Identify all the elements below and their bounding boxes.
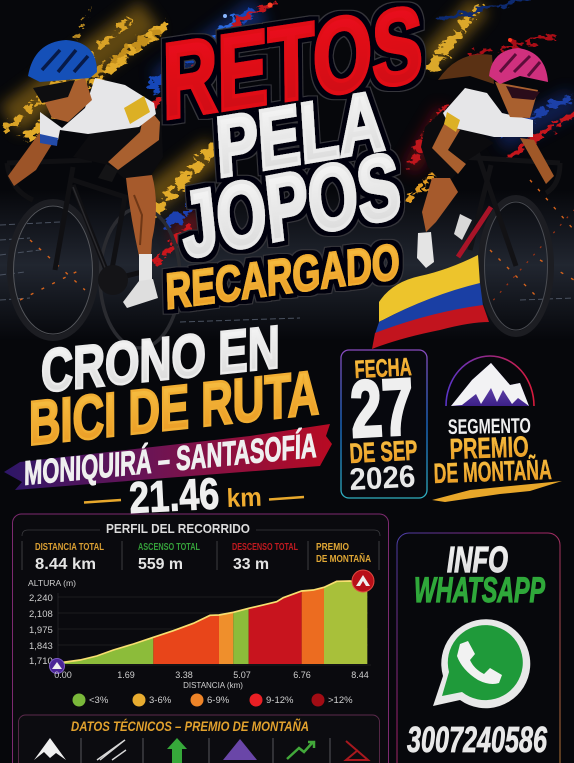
y axis labels: 2,240 [29,593,53,604]
title: PELA: PELA [213,73,387,195]
x axis labels [54,670,369,690]
right rider sunglasses [506,86,540,100]
right rider shoe [417,232,434,268]
x axis labels: DISTANCIA (km) [183,681,243,690]
gradient legend: 6-9% [207,695,230,706]
stat: mountain prize: PREMIO [316,542,349,553]
badge ring [446,356,534,406]
banner text: MONIQUIRÁ – SANTASOFÍA [24,427,317,493]
stat: distance [35,542,104,573]
banner brush [4,424,332,490]
right rider far shoe [454,214,472,240]
left bike frame [7,160,150,280]
badge mountain [451,363,529,406]
stat: ascent: ASCENSO TOTAL [138,542,200,553]
colombian flag [372,255,489,349]
left rider helmet [28,40,97,82]
y axis labels [28,578,76,667]
y axis labels: 1,710 [29,656,53,667]
left rider face [40,78,92,122]
premio text: PREMIO [449,431,529,466]
distance unit: km [226,482,262,513]
gradient legend [72,694,353,706]
stat: ascent: 559 m [138,556,183,573]
route banner [4,424,332,493]
segment badge [432,356,562,502]
right bike frame [461,143,560,266]
left rider shorts [73,108,163,180]
elevation chart [28,570,374,690]
left bike front wheel [10,202,96,338]
x axis labels: 1.69 [117,670,135,680]
gradient legend: >12% [328,695,353,706]
date year: 2026 [349,459,416,497]
right rider arm [432,122,466,174]
icon: green trend arrow [287,742,314,759]
technical data heading: DATOS TÉCNICOS – PREMIO DE MONTAÑA [71,717,309,734]
distance value: 21.46 [128,469,220,523]
panel: whatsapp contact [397,533,560,763]
x axis labels: 6.76 [293,670,311,680]
date card [341,350,427,498]
x axis labels: 5.07 [233,670,251,680]
gradient legend: 3-6% [149,695,172,706]
left rider sunglasses [33,80,75,103]
gradient legend: 9-12% [266,695,294,706]
gradient legend: <3% [89,695,109,706]
y axis labels: 1,843 [29,641,53,652]
stat: descent: 33 m [233,556,269,573]
title [162,0,423,320]
info heading: INFO [447,539,508,580]
left rider leg [126,175,156,256]
date label: FECHA [354,353,412,384]
right helmet vents [500,54,540,76]
cyclist right [417,48,560,334]
right bike front wheel [481,198,551,334]
background: paint splashes [0,0,574,340]
date day: 27 [348,362,416,454]
summit marker [352,570,374,592]
right rider leg [422,178,458,232]
icon: white mountain [34,738,66,760]
profile heading: PERFIL DEL RECORRIDO [106,521,250,536]
right sleeve stripes [444,112,460,132]
date month: DE SEP [349,434,418,469]
stat: descent [232,542,298,573]
icon: purple mountains [223,739,257,760]
y axis labels: 2,108 [29,609,53,620]
right rider helmet [489,48,548,84]
icon: whatsapp [433,619,530,708]
right rider forearm [520,138,554,184]
stat: distance: DISTANCIA TOTAL [35,542,104,553]
title: RECARGADO: RECARGADO [165,233,400,320]
left rider sleeve stripes [124,96,150,124]
stat: descent: DESCENSO TOTAL [232,542,298,553]
right rider face [495,82,538,118]
left rider sock and shoe [123,254,158,308]
stat: mountain prize: DE MONTAÑA [316,552,371,565]
route distance [84,469,304,523]
icon: ruler angle [97,740,126,760]
left rider arm [108,105,160,170]
x axis labels: 8.44 [351,670,369,680]
elevation profile [58,581,367,664]
left rider forearm [8,132,57,186]
stat: mountain prize [316,542,371,565]
icon: green up arrow [167,738,187,763]
subtitle: crono en: CRONO EN [41,313,280,405]
stat: distance: 8.44 km [35,556,96,573]
subtitle: bici de ruta: BICI DE RUTA [29,358,319,459]
stat: ascent [138,542,200,573]
start marker [50,658,64,674]
panel: technical data [18,715,380,763]
brush underline [432,481,562,502]
y axis labels: ALTURA (m) [28,578,76,588]
left helmet vents [42,50,88,72]
icon: red descent [346,741,368,760]
y axis labels: 1,975 [29,625,53,636]
title: JOPOS: JOPOS [176,133,405,278]
left glove [98,164,118,182]
segment text: SEGMENTO [448,415,531,439]
left rider jersey [40,78,156,140]
cyclist left [7,40,180,348]
right rider shorts [421,110,494,187]
right rider jersey [443,88,533,137]
x axis labels: 0.00 [54,670,72,680]
left bike rear wheel [100,208,180,348]
left bike chainring [98,265,128,295]
x axis labels: 3.38 [175,670,193,680]
right rider hair [438,54,494,84]
panel: course profile [12,514,388,763]
